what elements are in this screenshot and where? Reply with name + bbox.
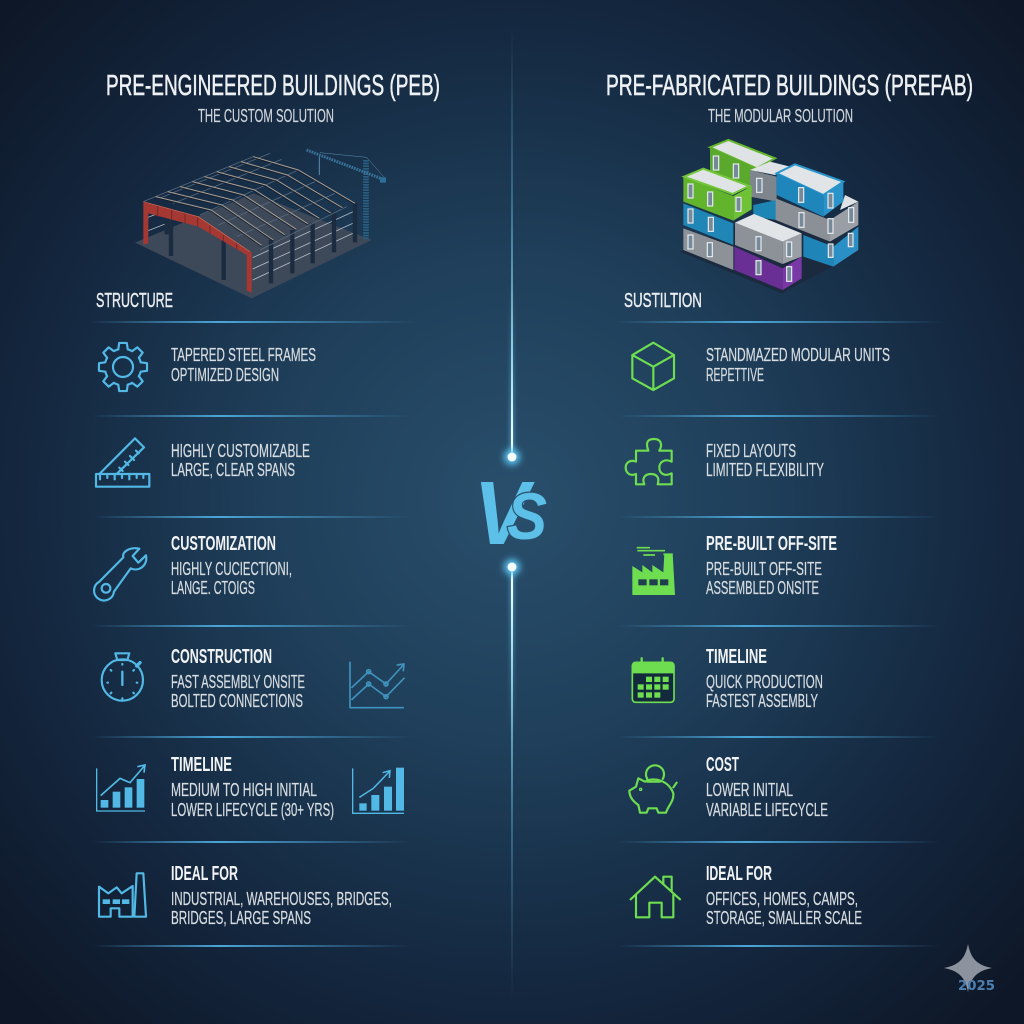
text: customization: HIGHLY CUCIECTIONI, <box>171 559 292 579</box>
text: timeline prefab: FASTEST ASSEMBLY <box>706 691 818 711</box>
text: ideal for PEB: BRIDGES, LARGE SPANS <box>171 908 311 928</box>
text: timeline <box>171 754 334 820</box>
text: timeline prefab: TIMELINE <box>706 646 767 668</box>
icon: wrench <box>94 548 146 600</box>
crane <box>307 150 386 239</box>
icon: cube <box>632 343 674 390</box>
text: timeline: MEDIUM TO HIGH INITIAL <box>171 780 317 800</box>
heading: sustiltion: SUSTILTION <box>624 290 702 312</box>
text: ideal for prefab <box>706 863 862 928</box>
text: construction <box>171 646 305 711</box>
text: ideal for PEB: INDUSTRIAL, WAREHOUSES, BRIDGES, <box>171 889 392 909</box>
icon: bar chart <box>97 765 145 811</box>
text: modular units: STANDMAZED MODULAR UNITS <box>706 345 890 365</box>
heading: structure: STRUCTURE <box>96 290 173 312</box>
text: timeline: LOWER LIFECYCLE (30+ YRS) <box>171 800 334 820</box>
title: PEB: PRE-ENGINEERED BUILDINGS (PEB) <box>106 70 440 102</box>
text: ideal for prefab: OFFICES, HOMES, CAMPS, <box>706 889 858 909</box>
text: customization <box>171 533 292 598</box>
panel: Prefab right column <box>606 70 973 947</box>
text: customizable <box>171 441 310 480</box>
text: frames <box>171 345 316 385</box>
text: timeline: TIMELINE <box>171 754 232 776</box>
text: cost: LOWER INITIAL <box>706 780 793 800</box>
text: fixed layouts: LIMITED FLEXIBILITY <box>706 460 824 480</box>
text: customization: CUSTOMIZATION <box>171 533 276 555</box>
text: frames: TAPERED STEEL FRAMES <box>171 345 316 365</box>
icon: line chart <box>350 662 404 708</box>
icon: gear <box>99 343 147 391</box>
text: pre-built off-site: ASSEMBLED ONSITE <box>706 578 819 598</box>
text: customization: LANGE. CTOIGS <box>171 578 255 598</box>
icon: stopwatch <box>102 653 143 701</box>
text: modular units: REPETTIVE <box>706 365 764 385</box>
text: pre-built off-site <box>706 533 837 598</box>
icon: house <box>631 877 680 917</box>
text: ideal for prefab: IDEAL FOR <box>706 863 772 885</box>
VS label: V <box>474 464 535 564</box>
text: cost <box>706 754 828 820</box>
text: pre-built off-site: PRE-BUILT OFF-SITE <box>706 533 837 555</box>
text: construction: BOLTED CONNECTIONS <box>171 691 303 711</box>
text: cost: COST <box>706 754 739 776</box>
subtitle: Prefab: THE MODULAR SOLUTION <box>708 106 853 126</box>
text: construction: CONSTRUCTION <box>171 646 272 668</box>
text: ideal for PEB: IDEAL FOR <box>171 863 238 885</box>
icon: ruler and set square <box>96 438 149 487</box>
icon: piggy bank <box>629 765 677 813</box>
illustration: stacked modular containers <box>680 140 863 293</box>
illustration: steel frame building and crane <box>135 150 386 298</box>
icon: bar chart right <box>353 768 404 813</box>
VS label: S <box>507 479 547 553</box>
text: frames: OPTIMIZED DESIGN <box>171 365 279 385</box>
text: modular units <box>706 345 890 385</box>
centre divider with VS badge <box>474 25 547 999</box>
icon: calendar <box>632 658 674 702</box>
text: construction: FAST ASSEMBLY ONSITE <box>171 672 305 692</box>
text: timeline prefab <box>706 646 823 711</box>
panel: PEB left column <box>88 70 440 947</box>
text: customizable: LARGE, CLEAR SPANS <box>171 460 295 480</box>
text: customizable: HIGHLY CUSTOMIZABLE <box>171 441 310 461</box>
icon: filled factory <box>632 548 675 595</box>
text: ideal for prefab: STORAGE, SMALLER SCALE <box>706 908 862 928</box>
icon: industrial factory outline <box>99 873 146 917</box>
text: fixed layouts <box>706 441 824 480</box>
text: ideal for PEB <box>171 863 392 928</box>
watermark: star and year: 2025 <box>958 979 995 994</box>
icon: puzzle piece <box>626 439 672 484</box>
text: timeline prefab: QUICK PRODUCTION <box>706 672 823 692</box>
subtitle: PEB: THE CUSTOM SOLUTION <box>198 106 334 126</box>
watermark: star and year <box>944 944 995 994</box>
text: pre-built off-site: PRE-BUILT OFF-SITE <box>706 559 822 579</box>
text: cost: VARIABLE LIFECYCLE <box>706 800 828 820</box>
text: fixed layouts: FIXED LAYOUTS <box>706 441 796 461</box>
